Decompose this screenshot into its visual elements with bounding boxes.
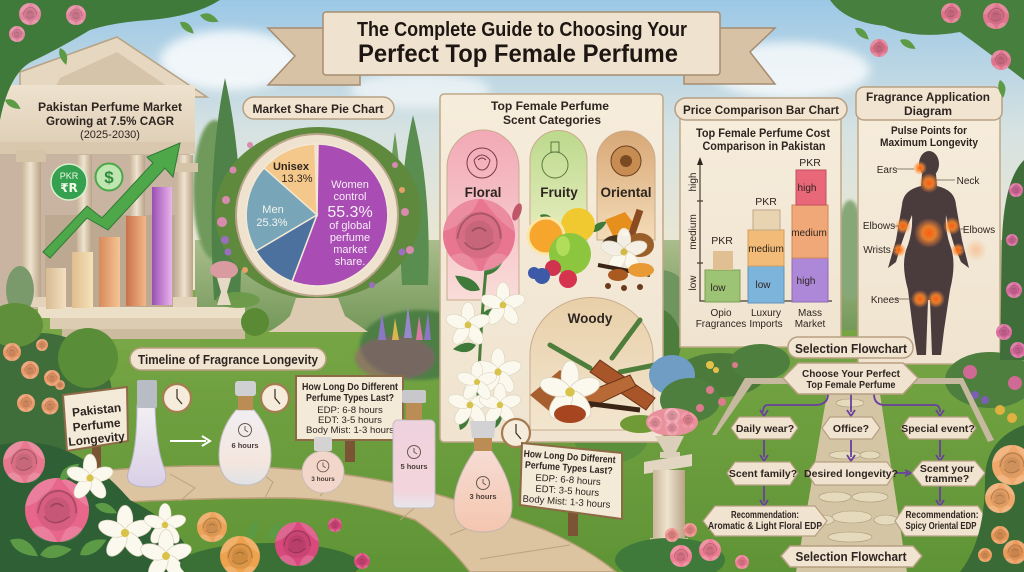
node: scent family	[727, 462, 798, 485]
node: scent tramme: tramme?	[925, 473, 969, 485]
arch: woody	[530, 298, 653, 430]
pie labels: Women	[331, 179, 369, 191]
node: special event	[901, 417, 976, 439]
foliage bottom left	[0, 441, 195, 572]
node: start	[783, 363, 918, 394]
arch: fruity	[530, 130, 587, 240]
bottle 5: 3 hours	[469, 492, 497, 501]
category labels: Fragrances	[696, 319, 746, 330]
sign: how long 1: Perfume Types Last?	[306, 393, 394, 404]
bottle 4 tall: 5 hours	[400, 462, 428, 471]
pie labels: Men	[262, 204, 284, 216]
sign: how long 2: EDT: 3-5 hours	[535, 484, 600, 499]
sign: how long 2: EDP: 6-8 hours	[535, 473, 601, 488]
bar: mass market: medium	[791, 228, 827, 239]
flowers bottom centre	[180, 512, 370, 572]
heading: market share pill: Market Share Pie Chart	[252, 102, 384, 116]
node: scent tramme: Scent your	[920, 463, 974, 475]
node: recommendation left: Aromatic & Light Floral EDP	[708, 521, 822, 532]
bottle 2	[219, 381, 271, 485]
flower wreath	[215, 127, 421, 299]
node: office: Office?	[833, 423, 869, 435]
category labels: Luxury	[751, 308, 781, 319]
chart title: Top Female Perfume Cost	[696, 128, 830, 140]
banner heading: The Complete Guide to Choosing Your	[357, 19, 687, 41]
illustration: spices	[598, 210, 654, 291]
bottle 3 small	[302, 437, 344, 493]
bush left	[0, 303, 118, 457]
slice: men	[246, 168, 317, 251]
pie labels: 55.3%	[327, 204, 373, 221]
panel heading: Top Female Perfume	[491, 99, 609, 113]
market growth bars	[46, 187, 172, 309]
bar: opio fragrances: low	[710, 283, 726, 294]
heading: selection flowchart top	[788, 337, 913, 358]
sign: how long 2	[520, 443, 622, 536]
stone pedestal	[644, 408, 698, 550]
heading: selection flowchart bottom	[781, 546, 922, 567]
axis labels: medium	[688, 214, 699, 250]
flowchart garden	[712, 378, 994, 572]
garden flowers mid right	[649, 344, 1024, 423]
icon: PKR coin: PKR	[60, 171, 79, 181]
pulse point glows	[892, 161, 987, 308]
pie labels: control	[333, 191, 367, 203]
node: daily wear: Daily wear?	[736, 423, 794, 435]
category labels	[696, 308, 826, 330]
node: special event: Special event?	[901, 423, 975, 435]
banner body	[323, 12, 720, 75]
node: start: Top Female Perfume	[806, 380, 896, 391]
illustration: rose stem	[443, 199, 524, 440]
node: recommendation left	[703, 506, 827, 536]
node: recommendation left: Recommendation:	[731, 510, 799, 521]
bar: luxury imports: low	[755, 280, 771, 291]
icon: dollar coin	[96, 164, 122, 190]
pie labels: perfume	[330, 232, 370, 244]
heading pill	[856, 87, 1002, 120]
illustration: fruit	[528, 208, 608, 288]
bottle 3 small: 3 hours	[311, 476, 335, 483]
pie pedestal	[268, 298, 368, 332]
diagram subtitle: Maximum Longevity	[880, 137, 979, 149]
pulse point labels: Elbows	[863, 221, 895, 232]
flowchart	[703, 337, 988, 567]
temple heading: Growing at 7.5% CAGR	[46, 116, 175, 128]
pie labels: Unisex	[273, 161, 310, 173]
diagram subtitle	[880, 125, 979, 149]
sign: how long 2: Perfume Types Last?	[525, 460, 613, 477]
growth arrow	[43, 143, 180, 258]
banner heading	[357, 19, 687, 68]
sign: pakistan longevity: Longevity	[68, 429, 126, 449]
foliage bottom right	[960, 425, 1024, 572]
body silhouette	[888, 151, 969, 355]
pulse point labels: Ears	[877, 165, 897, 176]
illustration: jasmine	[444, 282, 527, 427]
temple heading: (2025-2030)	[80, 129, 140, 141]
node: recommendation right: Spicy Oriental EDP	[906, 521, 977, 532]
bottle 2: 6 hours	[231, 441, 259, 450]
panel: scent categories	[440, 94, 663, 442]
arch: oriental	[597, 131, 655, 240]
bar: luxury imports: PKR	[755, 196, 777, 208]
sign: how long 1: How Long Do Different	[302, 382, 399, 393]
category labels: Imports	[749, 319, 783, 330]
node: scent family: Scent family?	[729, 468, 797, 480]
panel: fragrance application	[856, 87, 1002, 364]
pie labels: 25.3%	[256, 217, 288, 229]
pie labels: share.	[335, 256, 365, 268]
foliage right column	[996, 160, 1024, 360]
icon: PKR coin: ₹R	[60, 181, 78, 195]
bar: luxury imports: medium	[748, 244, 784, 255]
heading pill	[675, 98, 847, 120]
slice: women	[292, 144, 388, 286]
sign: how long 2: Body Mist: 1-3 hours	[522, 494, 611, 511]
chart title	[696, 128, 830, 153]
node: start: Choose Your Perfect	[802, 369, 901, 380]
pulse point labels: Knees	[871, 295, 899, 306]
slice: unisex	[264, 144, 317, 215]
bottle 5	[454, 421, 512, 532]
bar: opio fragrances: PKR	[711, 235, 733, 247]
bar: mass market: PKR	[799, 157, 821, 169]
foliage top left	[0, 0, 220, 120]
temple heading: Pakistan Perfume Market	[38, 102, 182, 114]
banner tail right	[684, 28, 775, 84]
arch: fruity: Fruity	[540, 185, 578, 200]
bar: mass market: high	[797, 276, 815, 287]
node: recommendation right	[895, 506, 988, 536]
axis labels: low	[688, 275, 699, 291]
arch: woody: Woody	[568, 311, 613, 326]
node: scent tramme	[912, 461, 985, 486]
sign: pakistan longevity	[63, 387, 128, 470]
arch: oriental: Oriental	[600, 185, 652, 200]
pulse point labels	[863, 165, 995, 306]
sign: pakistan longevity: Perfume	[72, 416, 122, 434]
category labels: Market	[795, 319, 826, 330]
sign: how long 1: EDP: 6-8 hours	[317, 405, 383, 416]
pie labels	[256, 161, 373, 268]
icon: PKR coin	[51, 164, 87, 200]
node: desired longevity: Desired longevity?	[804, 468, 898, 480]
banner heading: Perfect Top Female Perfume	[358, 40, 678, 68]
bar: opio fragrances	[705, 235, 740, 302]
chart title: Comparison in Pakistan	[702, 141, 826, 153]
illustration: woody ingredients	[530, 320, 660, 433]
diagram subtitle: Pulse Points for	[891, 125, 968, 137]
arch: floral	[447, 130, 519, 300]
pulse point labels: Elbows	[963, 225, 995, 236]
icon: clock 3	[502, 419, 530, 447]
panel heading	[491, 99, 609, 127]
axis labels	[688, 173, 699, 291]
heading: selection flowchart top: Selection Flowchart	[795, 342, 908, 356]
heading pill: Price Comparison Bar Chart	[683, 103, 839, 117]
temple	[0, 37, 245, 339]
node: desired longevity	[804, 462, 898, 485]
sign: how long 2: How Long Do Different	[523, 449, 616, 466]
sign: how long 1: EDT: 3-5 hours	[318, 415, 382, 426]
timeline arrow	[170, 436, 210, 446]
sign: how long 1	[296, 376, 403, 462]
temple heading	[38, 102, 182, 141]
pie labels: 13.3%	[281, 173, 313, 185]
bar chart	[688, 157, 832, 330]
pulse point labels: Neck	[957, 176, 980, 187]
pie chart	[236, 134, 398, 296]
timeline heading pill	[130, 348, 326, 370]
panel: price comparison	[675, 98, 847, 347]
heading: market share pill	[243, 97, 394, 119]
bottle 1	[128, 380, 166, 487]
heading pill: Fragrance Application	[866, 90, 990, 104]
panel heading: Scent Categories	[503, 113, 601, 127]
axes	[697, 160, 832, 301]
node: office	[822, 417, 880, 439]
heading pill: Diagram	[904, 104, 952, 118]
sign: how long 1: Body Mist: 1-3 hours	[306, 425, 394, 436]
node: recommendation right: Recommendation:	[906, 510, 978, 521]
banner tail left	[268, 28, 360, 85]
bar: luxury imports	[748, 196, 784, 303]
lupins	[378, 306, 431, 340]
heading: selection flowchart bottom: Selection Flowchart	[796, 549, 907, 564]
bottle 4 tall	[393, 390, 435, 508]
bar: mass market	[791, 157, 828, 302]
arch: floral: Floral	[465, 185, 501, 200]
garden path	[79, 466, 616, 572]
title banner	[268, 12, 775, 85]
icon: dollar coin: $	[104, 168, 114, 187]
foliage top right	[830, 0, 1024, 98]
urn and bushes by temple steps	[6, 261, 269, 336]
icon: clock 1	[163, 384, 191, 412]
slice: remainder	[256, 215, 317, 282]
pie labels: market	[333, 244, 367, 256]
bar: mass market: high	[798, 183, 816, 194]
axis labels: high	[688, 173, 699, 191]
sign: pakistan longevity: Pakistan	[71, 400, 122, 420]
flowers bottom mid	[615, 523, 749, 572]
category labels: Opio	[710, 308, 732, 319]
pie labels: of global	[329, 220, 371, 232]
category labels: Mass	[798, 308, 822, 319]
timeline heading pill: Timeline of Fragrance Longevity	[138, 353, 318, 367]
node: daily wear	[731, 417, 798, 439]
icon: clock 2	[261, 384, 289, 412]
flow arrows	[760, 394, 944, 506]
pulse point labels: Wrists	[863, 245, 891, 256]
